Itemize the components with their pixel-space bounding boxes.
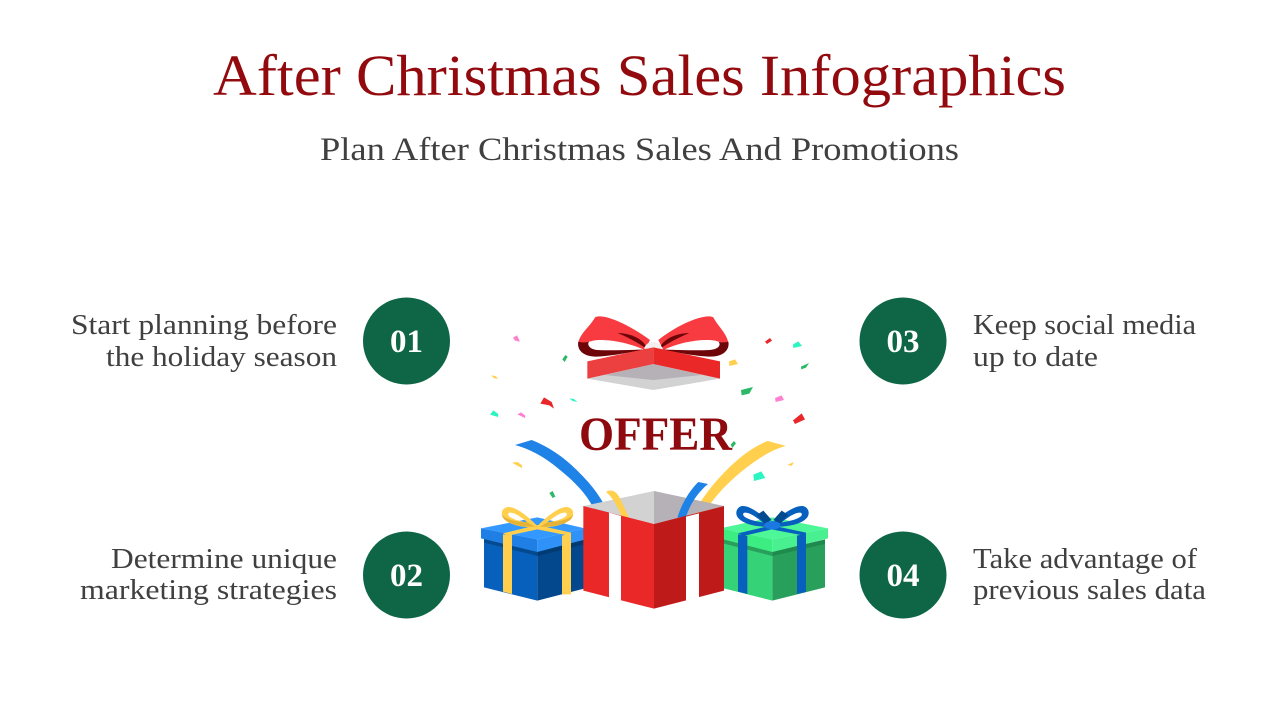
badge: 03: 03 bbox=[886, 324, 920, 360]
text: item 01: the holiday season bbox=[106, 341, 338, 373]
blue gift box bbox=[481, 507, 585, 601]
text: item 02: marketing strategies bbox=[80, 574, 337, 606]
icon: flying gift box lid with red bow bbox=[578, 316, 729, 390]
badge: 03 bbox=[860, 298, 946, 384]
text: item 03: Keep social media bbox=[973, 309, 1196, 341]
badge: 01 bbox=[363, 298, 450, 384]
badge: 04: 04 bbox=[886, 558, 920, 594]
streamer: long yellow right bbox=[693, 441, 786, 513]
open red gift box bbox=[583, 482, 724, 609]
text: item 01 bbox=[71, 309, 338, 373]
icon: confetti bbox=[490, 335, 809, 468]
green gift box bbox=[720, 506, 828, 601]
text: item 02 bbox=[80, 543, 337, 606]
badge: 01: 01 bbox=[390, 324, 423, 360]
subtitle: Plan After Christmas Sales And Promotions bbox=[320, 132, 959, 168]
badge: 04 bbox=[860, 532, 946, 618]
text: item 04: previous sales data bbox=[973, 574, 1206, 606]
text: item 01: Start planning before bbox=[71, 309, 337, 341]
confetti: lower pieces bbox=[549, 471, 765, 498]
text: item 02: Determine unique bbox=[111, 543, 337, 575]
badge: 02: 02 bbox=[390, 558, 423, 594]
text: item 03: up to date bbox=[973, 341, 1098, 373]
streamer: long blue left bbox=[515, 440, 608, 513]
text: item 04: Take advantage of bbox=[973, 543, 1197, 575]
word: OFFER: OFFER bbox=[579, 408, 733, 461]
title: After Christmas Sales Infographics bbox=[213, 43, 1066, 108]
text: item 03 bbox=[973, 309, 1196, 373]
icon: streamers and gift boxes bbox=[481, 440, 828, 609]
text: item 04 bbox=[973, 543, 1206, 606]
badge: 02 bbox=[363, 532, 450, 618]
